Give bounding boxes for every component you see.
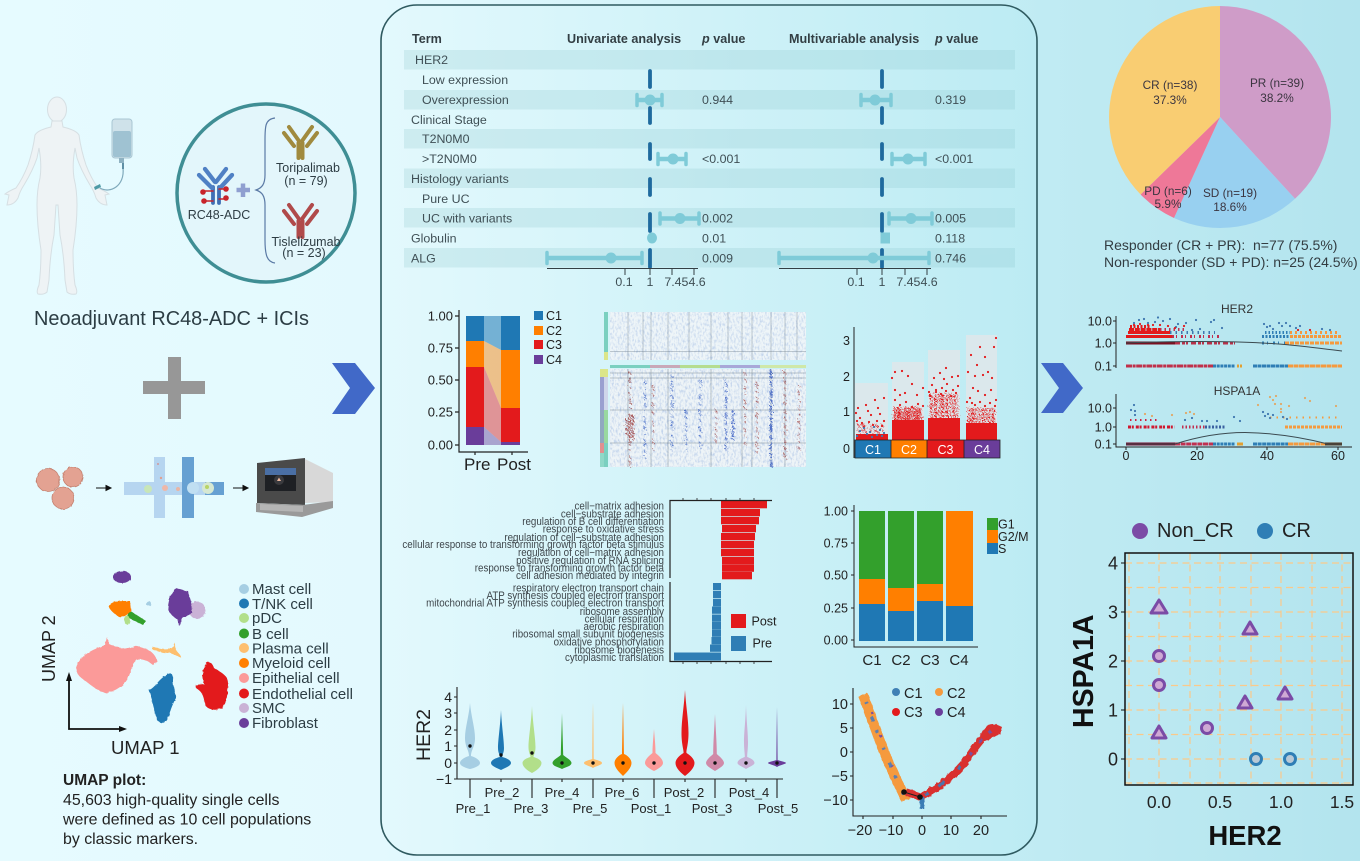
- chart: clinical response pie: SD (n=19): [1203, 186, 1257, 200]
- sample labels: [456, 785, 798, 816]
- legend: Post / Pre: Post: [752, 614, 777, 628]
- chart: HER2 violins: [413, 687, 798, 816]
- axis labels: 1: [647, 275, 654, 289]
- chart: pseudotime trajectory: −20: [848, 823, 872, 839]
- chart: cluster expression dot plot: 2: [843, 370, 850, 384]
- icon: plus: [236, 184, 250, 197]
- table term column: >T2N0M0: [422, 152, 477, 166]
- sample labels: Pre_1: [456, 801, 490, 816]
- chart: expression heatmap: [600, 312, 806, 467]
- GO term labels: regulation of cell−matrix adhesion: [518, 548, 664, 559]
- GO term labels: regulation of B cell differentiation: [522, 517, 664, 528]
- legend: cell populations: [239, 581, 353, 732]
- axis labels: 7.454.6: [896, 275, 938, 289]
- chart: HER2 vs HSPA1A scatter: 1.5: [1330, 792, 1354, 812]
- chart: cell cycle stacked bars: C2: [891, 652, 911, 669]
- confidence intervals: [547, 94, 932, 264]
- text block: UMAP description: were defined as 10 cell populations: [62, 812, 311, 828]
- legend: trajectory clusters: C2: [947, 686, 966, 702]
- sample labels: Post_5: [758, 801, 798, 816]
- chart: clinical response pie: 18.6%: [1213, 200, 1247, 214]
- chart: pseudotime trajectory: −10: [879, 823, 903, 839]
- legend: cell cycle phase: [987, 518, 1029, 556]
- table term column: Pure UC: [422, 192, 470, 206]
- legend: clusters: C3: [546, 338, 562, 352]
- sample labels: Post_2: [664, 785, 704, 800]
- chart: HER2 vs HSPA1A scatter: 0.0: [1147, 792, 1171, 812]
- icon: sequencing instrument: [256, 458, 333, 517]
- chart: HER2 expression along pseudotime: HER2: [1221, 302, 1253, 316]
- cluster colour bar: [855, 440, 1000, 458]
- chart: pseudotime trajectory: −10: [823, 793, 848, 809]
- icon: microfluidic chip: [124, 457, 224, 518]
- table header: Univariate analysis: [567, 32, 681, 46]
- GO term labels: mitochondrial ATP synthesis coupled electron transport: [426, 598, 664, 610]
- icon: RC48-ADC antibody: [199, 169, 232, 204]
- chart: HSPA1A expression along pseudotime: HSPA1A: [1214, 384, 1260, 398]
- icon: patient with infusion bag: [5, 97, 132, 294]
- panel: central analysis: [381, 5, 1037, 855]
- GO term labels: cellular respiration: [585, 614, 664, 626]
- chart: HER2 violins: 0: [444, 755, 452, 771]
- chart: HSPA1A expression along pseudotime: 0: [1123, 449, 1130, 463]
- legend: clusters: C4: [546, 353, 562, 367]
- legend: clusters: C1: [546, 309, 562, 323]
- legend: cell cycle phase: G1: [998, 518, 1015, 532]
- reference markers: [650, 71, 882, 267]
- icon: Tislelizumab antibody: [284, 205, 317, 237]
- label: Toripalimab: Toripalimab: [276, 161, 340, 175]
- chart: clinical response pie: PR (n=39): [1250, 76, 1304, 90]
- legend: cell populations: Epithelial cell: [252, 670, 340, 687]
- chart: UMAP of cell populations: [39, 571, 228, 758]
- text block: response summary: Non-responder (SD + PD): n=25 (24.5%): [1104, 254, 1358, 270]
- legend: trajectory clusters: C4: [947, 705, 966, 721]
- chart: cluster expression dot plot: [843, 327, 1000, 458]
- table: forest plot of univariate and multivariable analysis: [404, 32, 1015, 289]
- icon: large plus sign: [143, 357, 205, 419]
- label: HER2 axis: HER2: [413, 709, 435, 761]
- chart: HER2 violins: 3: [444, 705, 452, 721]
- chart: HER2 vs HSPA1A scatter: 1.0: [1269, 792, 1293, 812]
- legend: cell populations: B cell: [252, 626, 289, 643]
- table header: [412, 32, 978, 46]
- label: Tislelizumab: (n = 23): [282, 246, 326, 260]
- GO term labels: regulation of cell−substrate adhesion: [504, 533, 664, 544]
- GO term labels: [402, 501, 665, 664]
- arrow: chevron right: [1041, 363, 1083, 413]
- cluster colour bar: C2: [901, 443, 917, 457]
- GO term labels: response to oxidative stress: [543, 524, 664, 536]
- sample labels: Post_3: [692, 801, 732, 816]
- chart: HER2 expression along pseudotime: 0.1: [1095, 360, 1112, 374]
- p values: <0.001: [935, 152, 973, 166]
- chart: alluvial cluster proportions: Post: [497, 455, 531, 474]
- triangle markers: [1151, 600, 1292, 738]
- GO term labels: cytoplasmic translation: [565, 653, 664, 664]
- panel: treatment regimen circle: [177, 104, 355, 282]
- chart: clinical response pie: [1109, 6, 1331, 228]
- chart: HER2 vs HSPA1A scatter: 3: [1108, 602, 1118, 622]
- p values: 0.118: [935, 232, 965, 246]
- p values: 0.01: [702, 232, 726, 246]
- UMAP axes arrows: [69, 680, 120, 729]
- chart: alluvial cluster proportions: 0.00: [428, 438, 453, 452]
- chart: alluvial cluster proportions: 0.25: [428, 404, 453, 420]
- chart: cell cycle stacked bars: 0.50: [824, 568, 848, 582]
- sample labels: Pre_4: [545, 785, 579, 800]
- chart: HSPA1A expression along pseudotime: 1.0: [1095, 420, 1112, 434]
- chart: alluvial cluster proportions: 0.75: [428, 340, 453, 356]
- label: UMAP 2: UMAP 2: [39, 615, 59, 682]
- chart: clinical response pie: CR (n=38): [1143, 78, 1197, 92]
- chart: pseudotime trajectory: −5: [831, 769, 848, 785]
- table term column: [411, 53, 512, 266]
- GO term labels: aerobic respiration: [584, 622, 664, 633]
- chart: cell cycle stacked bars: [824, 504, 1029, 669]
- table term column: Clinical Stage: [411, 113, 487, 127]
- chart: HER2 vs HSPA1A scatter: 0: [1108, 750, 1118, 770]
- p values: 0.009: [702, 252, 733, 266]
- legend: response group: CR: [1282, 520, 1311, 542]
- GO term labels: cell adhesion mediated by integrin: [516, 571, 664, 582]
- legend: cell populations: Mast cell: [252, 581, 311, 598]
- chart: HSPA1A expression along pseudotime: 60: [1331, 449, 1345, 463]
- text block: response summary: Responder (CR + PR): n=77 (75.5%): [1104, 237, 1337, 253]
- sample labels: Post_1: [631, 801, 671, 816]
- cluster blobs: [76, 571, 228, 723]
- chart: HSPA1A expression along pseudotime: [1088, 384, 1352, 463]
- chart: HER2 expression along pseudotime: 10.0: [1088, 314, 1112, 328]
- chart: HER2 expression along pseudotime: 1.0: [1095, 336, 1112, 350]
- p values: 0.319: [935, 93, 966, 107]
- axis labels: 0.1: [615, 275, 633, 289]
- legend: trajectory clusters: C1: [904, 686, 923, 702]
- chart: cell cycle stacked bars: C3: [920, 652, 940, 669]
- arrow: tissue to microfluidics: [96, 486, 111, 490]
- chart: clinical response pie: PD (n=6): [1144, 184, 1192, 198]
- axis labels: 0.1: [847, 275, 865, 289]
- chart: HER2 violins: 4: [444, 689, 452, 705]
- legend: cell populations: Myeloid cell: [252, 655, 330, 672]
- legend: cell populations: Plasma cell: [252, 640, 329, 658]
- chart: cell cycle stacked bars: C4: [949, 652, 969, 669]
- chart: cluster expression dot plot: 0: [843, 442, 850, 456]
- chart: pseudotime trajectory: 5: [840, 721, 848, 737]
- GO term labels: positive regulation of RNA splicing: [516, 556, 664, 567]
- GO term labels: ribosome assembly: [580, 607, 665, 618]
- chart: pseudotime trajectory: [823, 686, 1007, 839]
- chart: HER2 violins: 1: [444, 738, 452, 754]
- chart: alluvial cluster proportions: 1.00: [428, 308, 453, 324]
- label: Tislelizumab: Tislelizumab: [271, 235, 341, 249]
- table term column: T2N0M0: [422, 132, 470, 146]
- chart: pseudotime trajectory: 0: [840, 745, 848, 761]
- legend: cell cycle phase: S: [998, 542, 1006, 556]
- legend: response group: Non_CR: [1157, 520, 1234, 542]
- axis labels: 1: [879, 275, 886, 289]
- sample labels: Pre_2: [485, 785, 519, 800]
- chart: HSPA1A expression along pseudotime: 40: [1260, 449, 1274, 463]
- chart: alluvial cluster proportions: 0.50: [428, 372, 453, 388]
- table term column: Overexpression: [422, 93, 509, 107]
- axis labels: 7.454.6: [664, 275, 706, 289]
- chart: cluster expression dot plot: 3: [843, 334, 850, 348]
- legend: cell populations: Endothelial cell: [252, 686, 353, 703]
- table header: p value: [701, 32, 745, 46]
- GO term labels: ATP synthesis coupled electron transport: [487, 591, 664, 602]
- chart: cell cycle stacked bars: 0.25: [824, 602, 848, 616]
- chart: HSPA1A expression along pseudotime: 20: [1190, 449, 1204, 463]
- chart: cell cycle stacked bars: 0.00: [824, 634, 848, 648]
- circle markers: [1154, 650, 1212, 734]
- chart: clinical response pie: 37.3%: [1153, 93, 1187, 107]
- text block: UMAP description: 45,603 high-quality single cells: [63, 792, 279, 809]
- legend: cell cycle phase: G2/M: [998, 530, 1029, 544]
- icon: Toripalimab antibody: [284, 127, 317, 158]
- table term column: Low expression: [422, 73, 508, 87]
- GO term labels: ribosome biogenesis: [574, 645, 664, 657]
- legend: Post / Pre: [731, 614, 777, 651]
- label: Toripalimab: (n = 79): [284, 174, 328, 188]
- chart: alluvial cluster proportions: [428, 308, 562, 474]
- p values: [702, 93, 973, 266]
- chart: alluvial cluster proportions: Pre: [464, 455, 490, 474]
- p values: 0.005: [935, 212, 966, 226]
- chart: clinical response pie: 38.2%: [1260, 91, 1294, 105]
- label: HSPA1A axis: HSPA1A: [1068, 614, 1100, 728]
- sample labels: Pre_5: [573, 801, 607, 816]
- chart: cell cycle stacked bars: C1: [862, 652, 882, 669]
- table term column: UC with variants: [422, 212, 512, 226]
- table header: p value: [934, 32, 978, 46]
- chart: pseudotime trajectory: 10: [943, 823, 959, 839]
- chart: pseudotime trajectory: 20: [973, 823, 989, 839]
- forest plot axes: [547, 268, 931, 275]
- text block: UMAP description: UMAP plot:: [63, 772, 146, 789]
- legend: trajectory clusters: [892, 686, 966, 721]
- table term column: Globulin: [411, 232, 457, 246]
- GO term labels: response to transforming growth factor beta: [475, 563, 664, 575]
- label: UMAP 1: UMAP 1: [111, 737, 180, 758]
- legend: cell populations: pDC: [252, 610, 282, 627]
- legend: trajectory clusters: C3: [904, 705, 923, 721]
- GO term labels: cellular response to transforming growth factor beta stimulus: [402, 540, 664, 551]
- sample labels: Post_4: [729, 785, 769, 800]
- p values: 0.746: [935, 252, 966, 266]
- GO term labels: ribosomal small subunit biogenesis: [512, 629, 664, 641]
- table header: Multivariable analysis: [789, 32, 919, 46]
- chart: cell cycle stacked bars: 1.00: [824, 504, 848, 518]
- chart: HER2 vs HSPA1A scatter: 4: [1108, 554, 1118, 574]
- chart: HSPA1A expression along pseudotime: 10.0: [1088, 402, 1112, 416]
- legend: cell populations: SMC: [252, 700, 286, 717]
- icon: brace: [256, 118, 275, 263]
- table header: Term: [412, 32, 442, 46]
- sample labels: Pre_3: [514, 801, 548, 816]
- legend: clusters: [534, 309, 562, 367]
- chart: pseudotime trajectory: 10: [832, 697, 848, 713]
- arrow: chevron left: [332, 363, 375, 414]
- GO term labels: respiratory electron transport chain: [513, 583, 664, 595]
- chart: cluster expression dot plot: 1: [843, 405, 850, 419]
- sample labels: Pre_6: [605, 785, 639, 800]
- chart: cell cycle stacked bars: 0.75: [824, 536, 848, 550]
- axis labels: [615, 275, 938, 289]
- legend: cell populations: Fibroblast: [252, 715, 319, 732]
- label: RC48-ADC: RC48-ADC: [188, 208, 250, 222]
- cluster colour bar: C4: [974, 443, 990, 457]
- red cell dots: [856, 338, 997, 441]
- icon: tumor tissue: [36, 467, 83, 509]
- legend: cell populations: T/NK cell: [252, 596, 313, 613]
- chart: HER2 violins: −1: [436, 771, 452, 787]
- p values: <0.001: [702, 152, 740, 166]
- chart: HER2 vs HSPA1A scatter: 2: [1108, 652, 1118, 672]
- chart: HSPA1A expression along pseudotime: 0.1: [1095, 438, 1112, 452]
- legend: clusters: C2: [546, 324, 562, 338]
- cluster colour bar: C1: [865, 443, 881, 457]
- p values: 0.002: [702, 212, 733, 226]
- table term column: HER2: [415, 53, 448, 67]
- chart: HER2 violins: 2: [444, 722, 452, 738]
- GO term labels: cell−substrate adhesion: [561, 509, 664, 521]
- chart: HER2 expression along pseudotime: [1088, 302, 1342, 374]
- chart: HER2 vs HSPA1A scatter: 0.5: [1208, 792, 1232, 812]
- chart: HER2 vs HSPA1A scatter: 1: [1108, 700, 1118, 720]
- legend: response group: [1132, 520, 1311, 542]
- cluster colour bar: C3: [938, 443, 954, 457]
- chart: clinical response pie: 5.9%: [1155, 197, 1182, 211]
- p values: 0.944: [702, 93, 733, 107]
- table term column: Histology variants: [411, 172, 509, 186]
- label: HER2 axis: HER2: [1208, 820, 1282, 851]
- arrow: microfluidics to sequencer: [233, 486, 248, 490]
- legend: Post / Pre: Pre: [752, 636, 772, 650]
- table term column: ALG: [411, 252, 436, 266]
- chart: HER2 vs HSPA1A scatter: [1068, 553, 1354, 851]
- GO term labels: oxidative phosphorylation: [554, 637, 664, 649]
- heading: neoadjuvant regimen: Neoadjuvant RC48-ADC + ICIs: [34, 308, 309, 330]
- chart: GO enrichment bars: [402, 498, 777, 664]
- median markers: [468, 744, 779, 765]
- chart: pseudotime trajectory: 0: [918, 823, 926, 839]
- GO term labels: cell−matrix adhesion: [575, 501, 664, 513]
- text block: UMAP description: by classic markers.: [63, 831, 198, 848]
